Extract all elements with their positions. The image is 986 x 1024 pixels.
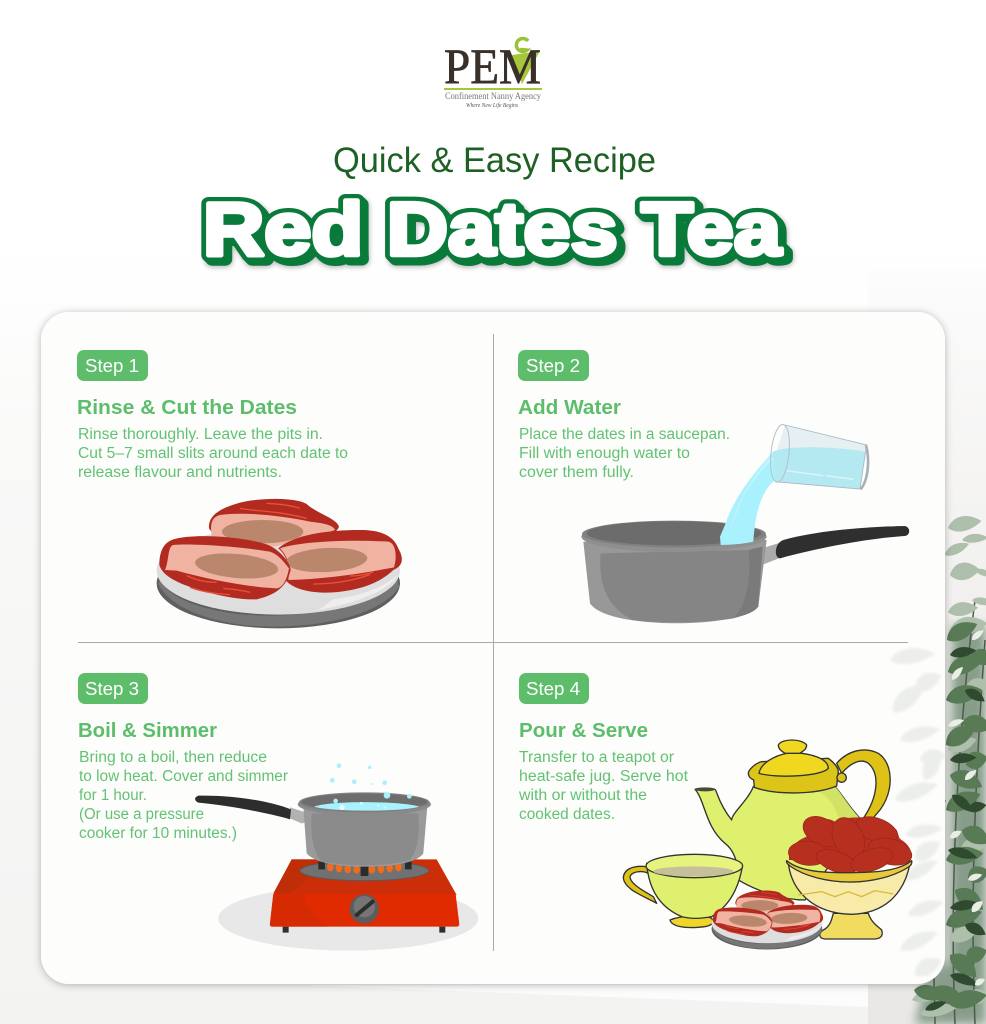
step 2 badge [518, 350, 589, 381]
subtitle: Quick & Easy Recipe [333, 141, 656, 180]
step 2 text: Place the dates in a saucepan. [519, 426, 730, 443]
divider lines [78, 334, 908, 951]
title: Red Dates Tea [205, 189, 784, 273]
step 1 text: release flavour and nutrients. [78, 464, 282, 481]
step 3 badge [78, 673, 148, 704]
panel: step 1 [77, 350, 402, 628]
step 1 badge [77, 350, 148, 381]
step 2 heading: Add Water [518, 397, 621, 419]
plant decoration [911, 513, 986, 1024]
step 3 text: for 1 hour. [79, 787, 147, 804]
step 3 text: (Or use a pressure [79, 806, 204, 823]
step 3 text: to low heat. Cover and simmer [79, 768, 288, 785]
step 2 text: cover them fully. [519, 464, 634, 481]
logo: PEM [444, 38, 541, 94]
logo: Confinement Nanny Agency [445, 91, 541, 102]
panel: recipe card [41, 312, 947, 984]
step 2 badge: Step 2 [526, 356, 580, 376]
step 3 text: cooker for 10 minutes.) [79, 825, 237, 842]
step 1 text: Cut 5–7 small slits around each date to [78, 445, 348, 462]
title: Red Dates Tea [203, 187, 782, 271]
step 4 text [518, 749, 689, 823]
step 3 badge: Step 3 [85, 679, 139, 699]
step 4 text: heat-safe jug. Serve hot [519, 768, 689, 785]
icon: cut dates on plate [157, 499, 402, 628]
step 4 text: cooked dates. [519, 806, 615, 823]
step 1 text: Rinse thoroughly. Leave the pits in. [78, 426, 323, 443]
step 4 text: with or without the [518, 787, 647, 804]
step 3 heading: Boil & Simmer [78, 720, 217, 742]
step 1 badge: Step 1 [85, 356, 139, 376]
step 4 badge: Step 4 [526, 679, 580, 699]
step 1 text [78, 426, 348, 481]
icon: teapot, cup and dates [623, 740, 915, 949]
title: Red Dates Tea [207, 192, 786, 276]
step 4 badge [519, 673, 589, 704]
step 3 text: Bring to a boil, then reduce [79, 749, 267, 766]
step 2 text [519, 426, 730, 481]
step 3 text [79, 749, 288, 842]
panel: step 2 [518, 350, 909, 623]
title: Red Dates Tea [203, 187, 782, 271]
step 2 text: Fill with enough water to [519, 445, 690, 462]
icon: water pouring into saucepan [581, 424, 909, 623]
panel: step 3 [78, 673, 478, 951]
panel: step 4 [518, 673, 915, 949]
step 4 text: Transfer to a teapot or [519, 749, 674, 766]
logo: Where New Life Begins [466, 102, 519, 109]
icon: saucepan on stove [195, 763, 478, 951]
step 4 heading: Pour & Serve [519, 720, 648, 742]
step 1 heading: Rinse & Cut the Dates [77, 397, 297, 419]
title: Red Dates Tea [207, 191, 786, 275]
